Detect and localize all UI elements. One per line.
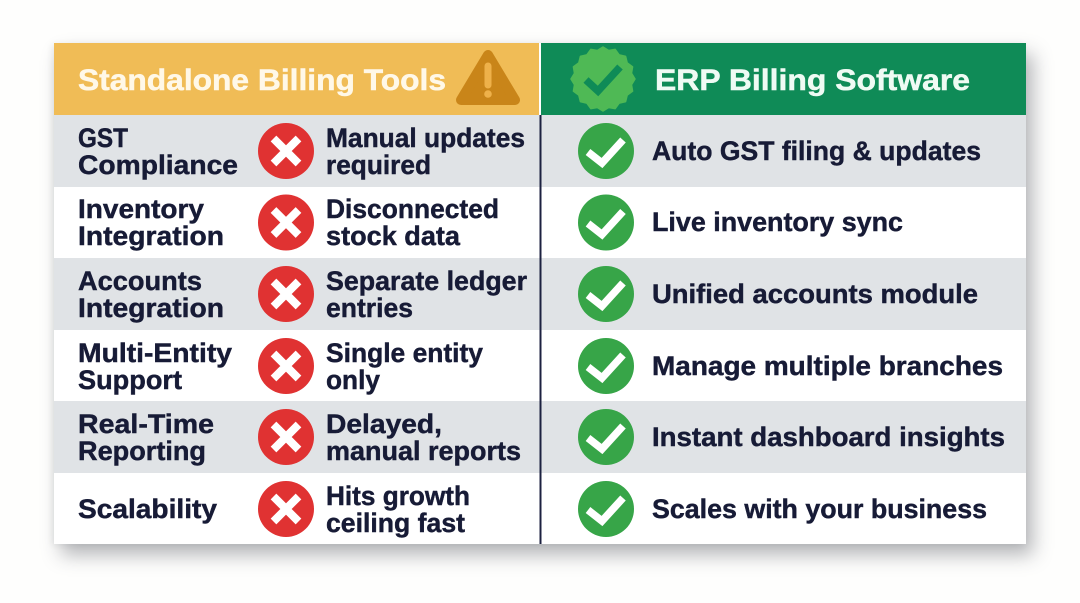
erp description: Manage multiple branches: [652, 351, 1003, 381]
erp description: Scales with your business: [652, 494, 987, 524]
standalone description: entries: [326, 293, 413, 323]
feature label: Support: [78, 365, 182, 395]
feature label: Reporting: [78, 436, 206, 466]
standalone description: manual reports: [326, 436, 521, 466]
icon: red cross: [258, 409, 314, 465]
comparison table background: [54, 43, 1026, 544]
row: accounts integration: [78, 266, 978, 323]
heading: standalone billing tools: Standalone Billing Tools: [78, 64, 446, 97]
standalone description: stock data: [326, 221, 461, 251]
icon: warning triangle: [461, 55, 515, 100]
icon: green check: [578, 123, 634, 179]
erp description: Auto GST filing & updates: [652, 136, 981, 166]
icon: green check: [578, 409, 634, 465]
standalone description: Disconnected: [326, 194, 499, 224]
standalone description: Hits growth: [326, 481, 470, 511]
icon: green check: [578, 194, 634, 250]
feature label: Integration: [78, 221, 224, 251]
header: standalone billing tools: [54, 43, 539, 115]
standalone description: Single entity: [326, 338, 483, 368]
row: gst compliance: [78, 123, 981, 180]
icon: red cross: [258, 266, 314, 322]
erp description: Unified accounts module: [652, 279, 978, 309]
row: multi-entity support: [78, 338, 1003, 395]
feature label: Integration: [78, 293, 224, 323]
icon: green check: [578, 338, 634, 394]
icon: red cross: [258, 123, 314, 179]
row: scalability: [78, 481, 987, 538]
icon: green verified badge: [571, 47, 635, 111]
icon: green check: [578, 266, 634, 322]
standalone description: Delayed,: [326, 409, 442, 439]
standalone description: required: [326, 150, 431, 180]
standalone description: Manual updates: [326, 123, 525, 153]
feature label: Compliance: [78, 150, 238, 180]
icon: red cross: [258, 194, 314, 250]
feature label: Accounts: [78, 266, 202, 296]
icon: red cross: [258, 481, 314, 537]
row: inventory integration: [78, 194, 903, 251]
heading: erp billing software: ERP Billing Software: [655, 64, 970, 97]
feature label: Multi-Entity: [78, 338, 232, 368]
row: real-time reporting: [78, 409, 1005, 466]
feature label: Inventory: [78, 194, 204, 224]
standalone description: only: [326, 365, 380, 395]
standalone description: Separate ledger: [326, 266, 527, 296]
feature label: Real-Time: [78, 409, 214, 439]
header: erp billing software: [541, 43, 1026, 115]
icon: red cross: [258, 338, 314, 394]
icon: green check: [578, 481, 634, 537]
erp description: Live inventory sync: [652, 207, 903, 237]
feature label: Scalability: [78, 494, 217, 524]
feature label: GST: [78, 123, 128, 153]
erp description: Instant dashboard insights: [652, 422, 1005, 452]
standalone description: ceiling fast: [326, 508, 465, 538]
